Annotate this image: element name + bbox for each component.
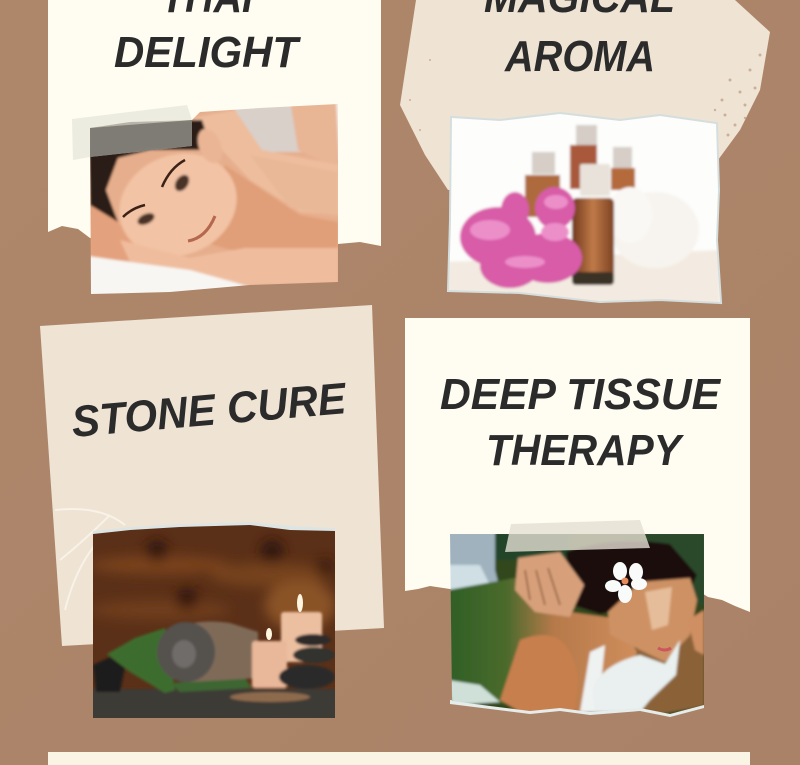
photo: candles towel and stones <box>90 520 340 720</box>
heading: thai delight: DELIGHT <box>114 28 301 77</box>
photo: woman receiving shoulder massage <box>88 100 340 300</box>
panel: deep tissue therapy <box>405 318 750 717</box>
washi tape <box>72 105 192 160</box>
paper speckles <box>409 54 762 136</box>
photo: essential oils and pink flowers <box>445 110 725 305</box>
bottom cream panel <box>48 752 750 765</box>
beige irregular paper <box>400 0 770 190</box>
decorative leaf outline <box>55 509 125 610</box>
heading: magical aroma: AROMA <box>504 32 655 81</box>
heading: deep tissue therapy: THERAPY <box>486 426 684 475</box>
heading: stone cure: STONE CURE <box>70 374 349 447</box>
beige tilted card <box>40 305 384 646</box>
heading: deep tissue therapy: DEEP TISSUE <box>440 370 722 419</box>
heading: thai delight <box>114 0 301 77</box>
cream torn paper card <box>405 318 750 612</box>
icon: white flower <box>605 562 647 603</box>
heading: deep tissue therapy <box>440 370 722 475</box>
cream torn paper card <box>48 0 381 246</box>
photo: back massage with flower <box>448 532 706 717</box>
heading: magical aroma <box>484 0 675 81</box>
panel: magical aroma <box>400 0 770 305</box>
washi tape <box>505 520 650 552</box>
panel: thai delight <box>48 0 381 300</box>
panel: stone cure <box>40 305 384 720</box>
